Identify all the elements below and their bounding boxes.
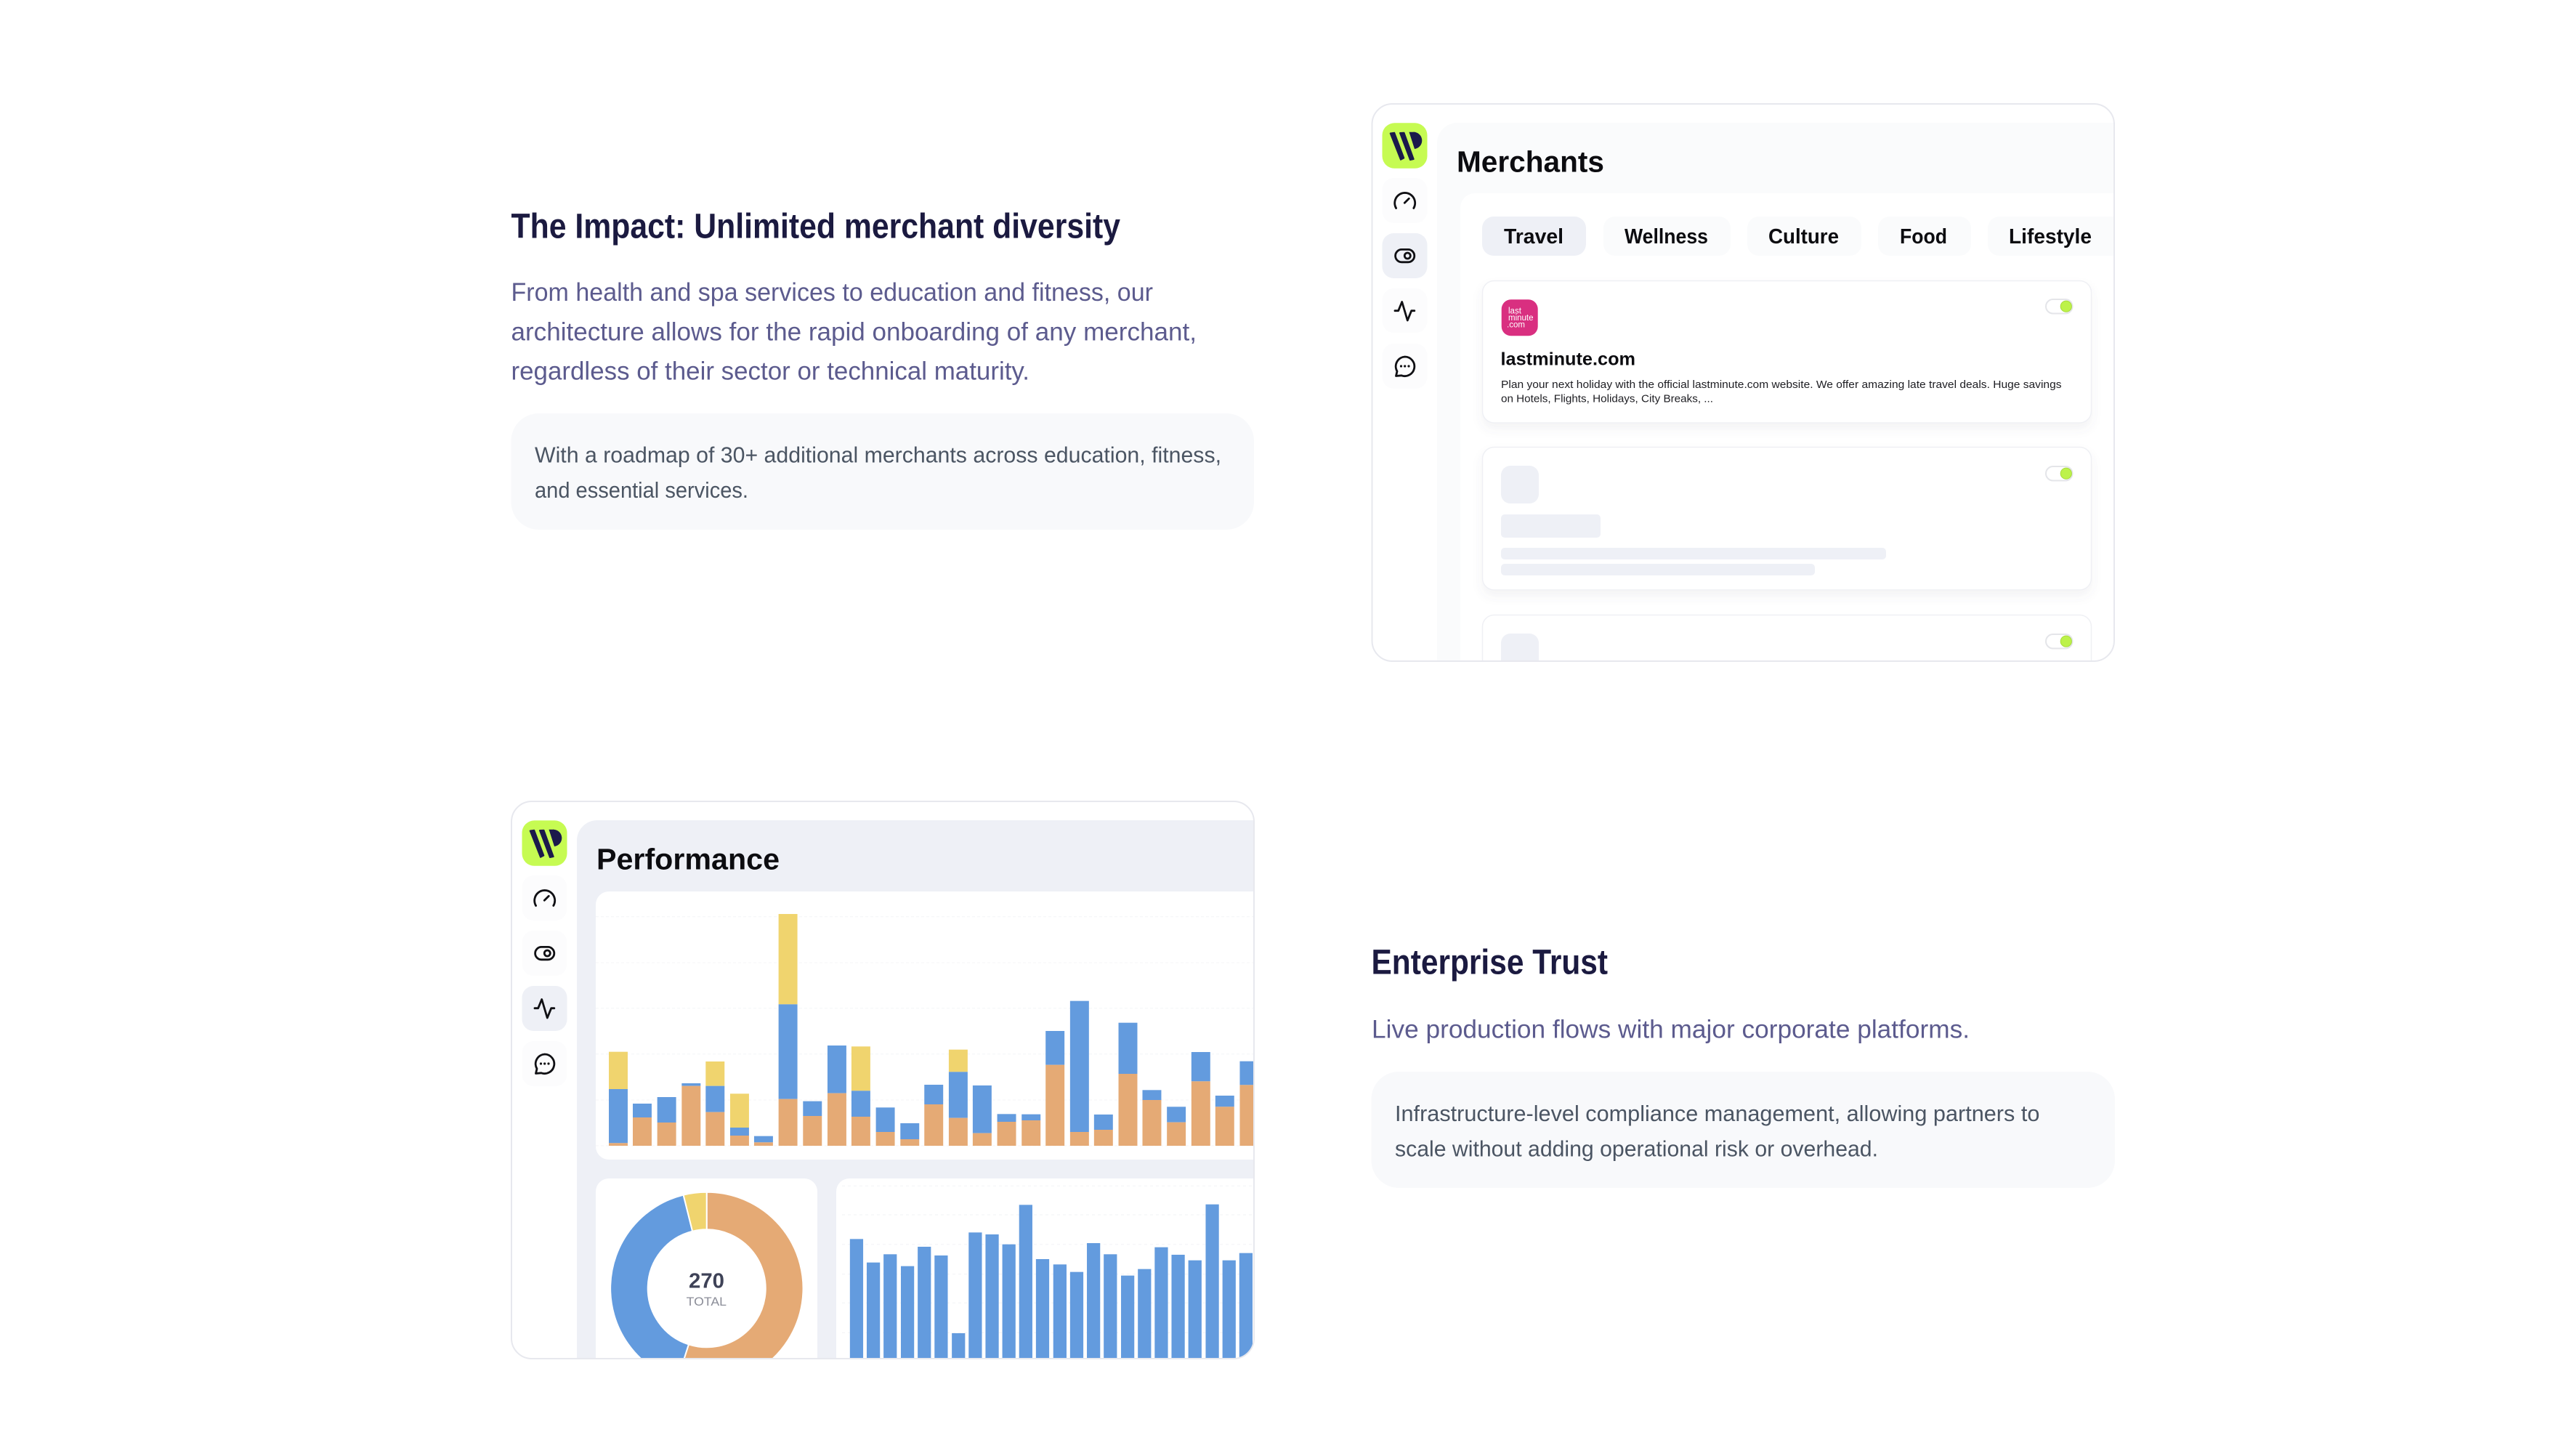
tabs [1482,217,2126,256]
icon: lastminute logo: .com [1507,320,1525,329]
nav item: gauge [1393,192,1417,209]
donut chart card: TOTAL [687,1295,727,1309]
section: enterprise trust [1372,944,2115,1188]
icon: lastminute logo: last [1508,307,1522,316]
text block: impact description: architecture allows for the rapid onboarding of any merchant, [511,318,1197,346]
title: performance: Performance [596,843,780,876]
callout: roadmap [511,413,1254,530]
nav item: chat [522,1041,567,1086]
title: merchants: Merchants [1457,145,1604,179]
card: placeholder 1 [1482,448,2091,590]
icon: lastminute logo: minute [1508,314,1534,323]
callout: compliance: Infrastructure-level compliance management, allowing partners to [1395,1101,2039,1126]
merchants content container [1460,193,2187,774]
tabs: Wellness [1625,225,1708,248]
tabs: Lifestyle [2009,225,2092,248]
card: placeholder 2 [1482,615,2092,660]
icon: lastminute logo [1502,299,1538,336]
callout: compliance [1372,1072,2115,1188]
heading: enterprise trust: Enterprise Trust [1372,944,1608,982]
nav item: pulse (active) [522,986,567,1031]
text block: impact description: From health and spa services to education and fitness, our [511,278,1153,307]
panel: performance dashboard [511,801,1255,1359]
text block: trust description: Live production flows with major corporate platforms. [1372,1015,1970,1043]
nav item: pulse [1393,301,1415,321]
tabs: Culture [1768,225,1839,248]
bar chart [836,1178,1417,1396]
nav item: toggle eye [522,931,567,976]
icon: logo [522,820,567,866]
nav item: chat [1395,356,1415,378]
heading: the impact: The Impact: Unlimited merchant diversity [511,207,1120,246]
performance main area background [577,820,1253,1358]
nav item: gauge [522,875,567,921]
icon: logo [1382,123,1427,169]
tabs: Travel [1504,225,1563,248]
card: lastminute.com: Plan your next holiday with the official lastminute.com website. We offer amazing late travel deals. Huge savings [1501,379,2062,391]
donut chart card [596,1178,817,1396]
tabs: Food [1900,225,1947,248]
toggle [2046,299,2072,314]
callout: roadmap: With a roadmap of 30+ additional merchants across education, fitness, [535,442,1221,468]
callout: compliance: scale without adding operational risk or overhead. [1395,1136,1878,1162]
callout: roadmap: and essential services. [535,477,748,503]
card: lastminute.com [1482,280,2091,423]
text block: impact description [511,278,1197,386]
nav item: toggle eye (active) [1382,233,1427,278]
merchants main area background [1437,123,2164,704]
section: the impact [511,207,1254,530]
card: lastminute.com: on Hotels, Flights, Holidays, City Breaks, ... [1501,393,1713,405]
card: lastminute.com: lastminute.com [1501,349,1635,369]
text block: impact description: regardless of their sector or technical maturity. [511,357,1029,386]
stacked bar chart [596,891,1322,1160]
panel: merchants dashboard [1372,103,2115,662]
donut chart card: 270 [689,1270,724,1293]
